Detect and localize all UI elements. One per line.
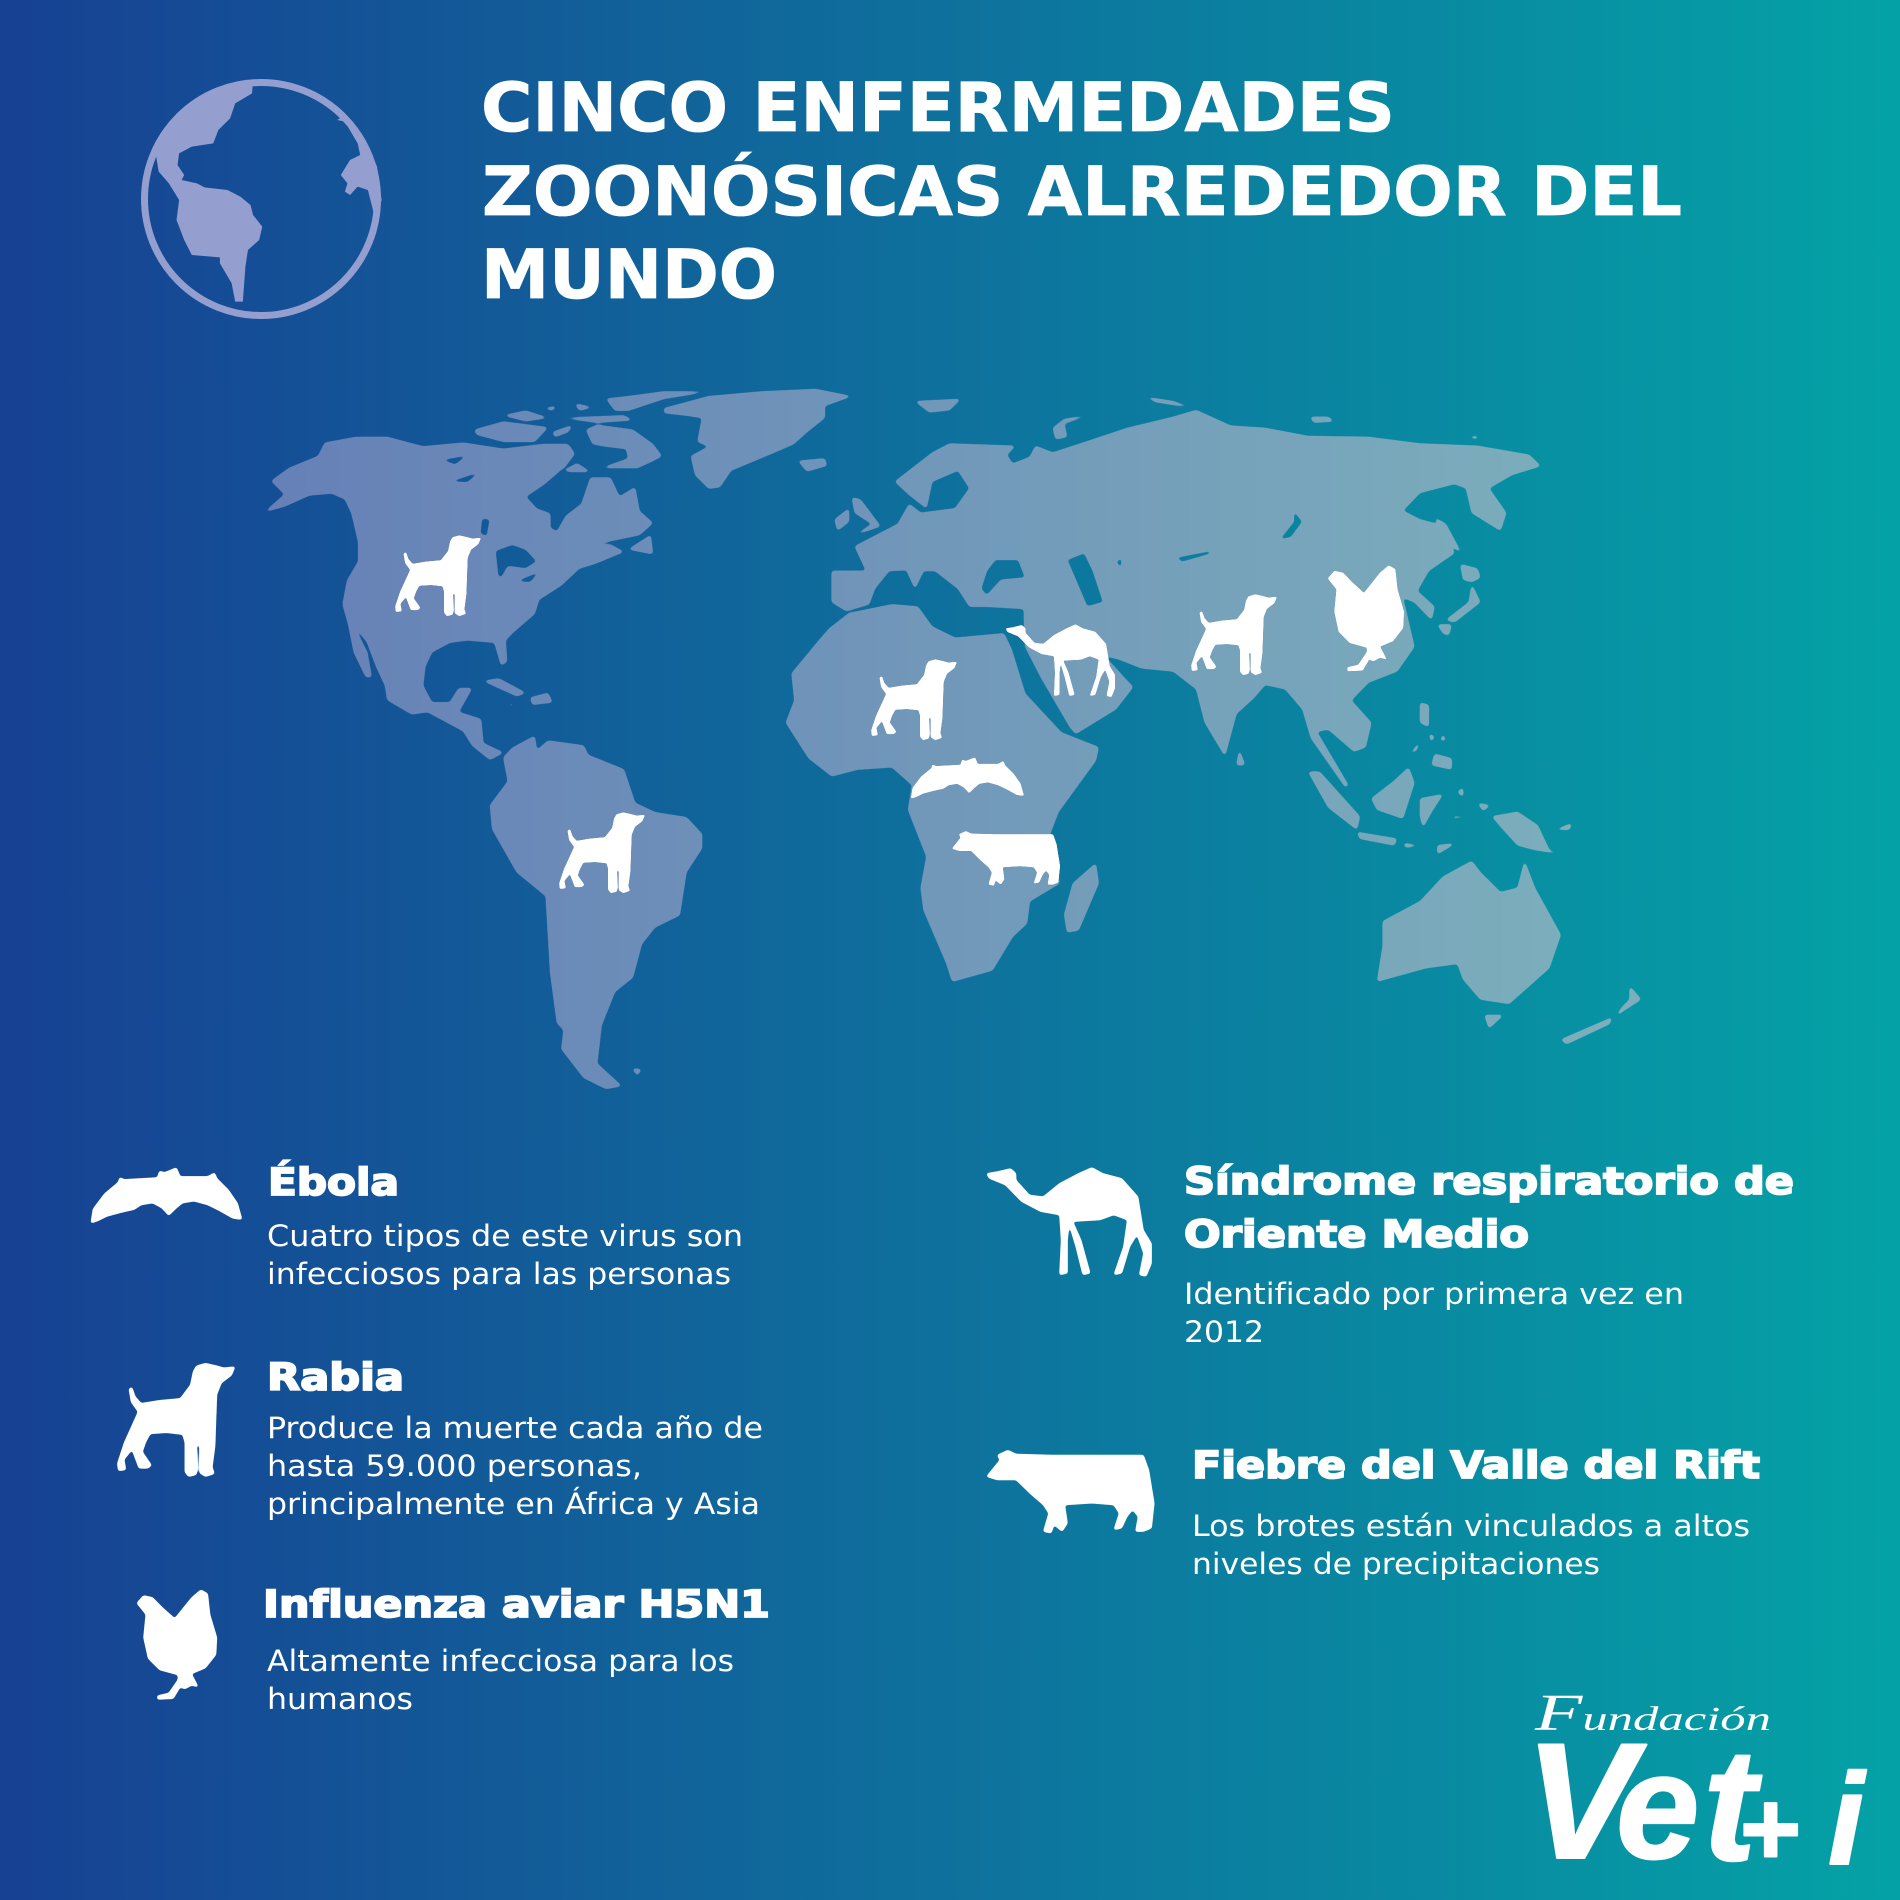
heading: Síndrome respiratorio de Oriente Medio: Oriente Medio xyxy=(1184,1213,1529,1256)
text: Fiebre description: Los brotes están vinculados a altos xyxy=(1192,1509,1750,1543)
legend: Rabia xyxy=(117,1356,763,1521)
icon: chicken xyxy=(137,1590,217,1700)
Southeast Asia islands xyxy=(1308,703,1572,854)
map marker: dog, South America xyxy=(559,812,645,893)
icon: cow xyxy=(986,1450,1154,1533)
legend: Ébola xyxy=(91,1160,743,1291)
logo: Fundación Vet+i xyxy=(1525,1685,1867,1894)
logo: Fundación Vet+i: V xyxy=(1525,1709,1647,1893)
text: Rabia description: hasta 59.000 personas, xyxy=(267,1449,642,1483)
icon: globe xyxy=(144,80,382,315)
logo: Fundación Vet+i: t xyxy=(1703,1715,1762,1894)
logo: Fundación Vet+i: e xyxy=(1616,1722,1699,1890)
Arctic islands and Greenland xyxy=(474,389,852,489)
text: Fiebre description: niveles de precipitaciones xyxy=(1192,1547,1600,1581)
northern islands xyxy=(835,397,1480,535)
map marker: cow xyxy=(952,831,1060,886)
title: ZOONÓSICAS ALREDEDOR DEL xyxy=(482,152,1682,232)
title: CINCO ENFERMEDADES xyxy=(481,69,1395,148)
Sri Lanka and Madagascar xyxy=(1064,749,1245,932)
text: Síndrome description xyxy=(1184,1277,1684,1349)
map marker: dog, Asia xyxy=(1191,594,1277,675)
Japan and Sakhalin xyxy=(1434,517,1480,636)
heading: Síndrome respiratorio de Oriente Medio xyxy=(1184,1160,1794,1256)
text: Rabia description: Produce la muerte cada año de xyxy=(267,1411,763,1445)
map: Americas xyxy=(265,389,852,1089)
text: Ébola description: infecciosos para las personas xyxy=(267,1257,731,1291)
legend: Fiebre del Valle del Rift xyxy=(986,1444,1760,1581)
logo: Fundación Vet+i: i xyxy=(1828,1746,1867,1892)
text: Rabia description xyxy=(267,1411,763,1521)
legend: Influenza aviar xyxy=(137,1583,770,1716)
map marker: dog, Africa xyxy=(871,659,957,740)
heading: Rabia: Rabia xyxy=(267,1356,404,1399)
heading: Ébola: Ébola xyxy=(268,1160,399,1204)
text: Ébola description: Cuatro tipos de este virus son xyxy=(267,1219,743,1253)
heading: Influenza aviar H5N1: Influenza aviar H5N1 xyxy=(263,1583,770,1626)
icon: bat xyxy=(91,1168,242,1223)
map: Africa, Eurasia and Oceania xyxy=(786,397,1641,1044)
title xyxy=(481,69,1682,315)
heading: Fiebre del Valle del Rift: Fiebre del Valle del Rift xyxy=(1192,1444,1760,1487)
title: MUNDO xyxy=(481,236,777,315)
text: Ébola description xyxy=(267,1219,743,1291)
text: Rabia description: principalmente en África y Asia xyxy=(267,1487,760,1521)
map marker: dog, North America xyxy=(395,535,481,616)
text: Síndrome description: 2012 xyxy=(1184,1315,1264,1349)
icon: camel xyxy=(986,1167,1152,1277)
text: Influenza description: humanos xyxy=(267,1682,413,1716)
world map xyxy=(265,389,1641,1089)
text: Influenza description: Altamente infecciosa para los xyxy=(267,1644,734,1678)
heading: Síndrome respiratorio de Oriente Medio: Síndrome respiratorio de xyxy=(1184,1160,1794,1203)
text: Influenza description xyxy=(267,1644,734,1716)
Eurasia xyxy=(832,410,1541,787)
map marker: camel xyxy=(1006,625,1115,697)
Baja California, Caribbean and Newfoundland xyxy=(347,535,653,706)
logo: Fundación Vet+i: F undación xyxy=(1534,1685,1771,1742)
text: Síndrome description: Identificado por primera vez en xyxy=(1184,1277,1684,1311)
text: Fiebre description xyxy=(1192,1509,1750,1581)
Australia and New Zealand xyxy=(1377,861,1641,1044)
North America xyxy=(265,437,653,760)
icon: dog xyxy=(117,1363,235,1477)
logo: Fundación Vet+i: + xyxy=(1740,1771,1801,1888)
Africa xyxy=(786,604,1099,982)
legend: Síndrome respiratorio xyxy=(986,1160,1794,1349)
South America xyxy=(490,736,702,1089)
map marker: bat xyxy=(911,758,1024,799)
map marker: chicken xyxy=(1328,566,1404,671)
